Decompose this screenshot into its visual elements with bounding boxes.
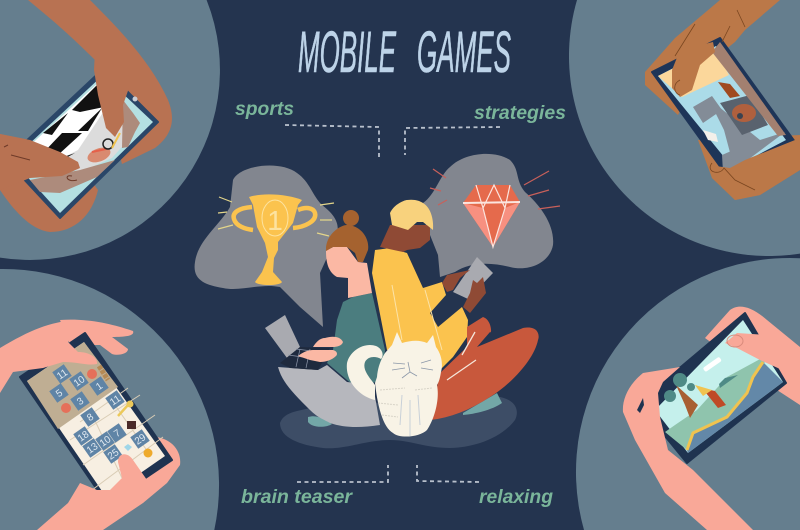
hands behind phone [645, 0, 800, 200]
label: strategies: strategies [474, 103, 566, 124]
label: relaxing: relaxing [479, 487, 553, 508]
number tiles: 3 [75, 395, 86, 408]
phone [652, 38, 795, 176]
panel: strategies phone circle [569, 0, 800, 256]
connector lines [285, 125, 500, 482]
phone [20, 333, 172, 504]
title: MOBILE [298, 20, 397, 85]
thumb [725, 333, 800, 378]
phone [638, 313, 786, 463]
fingers [94, 50, 130, 137]
top hand palm [0, 320, 97, 393]
number tiles: 8 [85, 411, 96, 424]
ground shadow [280, 397, 517, 448]
fingers [672, 42, 715, 97]
number tiles: 11 [108, 393, 123, 408]
castle game [693, 82, 785, 172]
icon: trophy [218, 194, 334, 285]
cat [347, 332, 442, 437]
panel: brain teaser phone circle [0, 269, 219, 530]
fingers behind phone [60, 320, 180, 503]
icon: race car [86, 96, 138, 165]
panel: relaxing phone circle [576, 258, 800, 530]
number tiles: 5 [54, 387, 65, 400]
thought blob: trophy [195, 166, 338, 327]
illustration: people with cat [195, 154, 560, 448]
label: brain teaser: brain teaser [241, 487, 354, 508]
number tiles: 18 [76, 429, 92, 445]
number tiles: 10 [72, 374, 88, 390]
laptop [265, 315, 300, 358]
number tiles: 1 [94, 380, 105, 393]
tree and fox [664, 357, 738, 418]
left hand [623, 367, 753, 530]
number tiles: 10 [98, 434, 114, 450]
number tiles: 13 [85, 441, 101, 457]
number tiles [49, 364, 150, 464]
number tiles: 25 [106, 447, 122, 463]
text: GAMES [417, 20, 511, 85]
icon: diamond [430, 169, 560, 247]
man [372, 200, 539, 420]
bottom hand palm [37, 454, 157, 530]
icon: trophy: 1 [267, 205, 283, 236]
hands behind phone [0, 0, 172, 232]
number tiles: 7 [112, 427, 123, 440]
far hand behind [705, 307, 800, 405]
number tiles: 11 [55, 367, 70, 382]
woman [265, 210, 385, 427]
panel: sports phone circle [0, 0, 220, 260]
thought blob: diamond [420, 154, 553, 277]
phone [6, 68, 158, 218]
label: sports: sports [235, 99, 294, 120]
game items [61, 366, 152, 458]
number tiles: 29 [133, 432, 149, 448]
